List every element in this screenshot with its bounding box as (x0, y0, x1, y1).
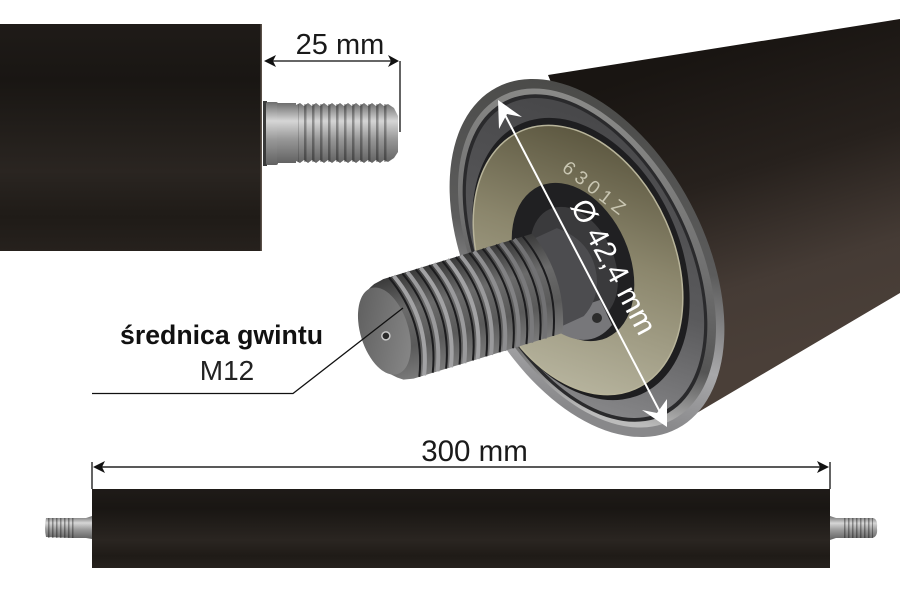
roller body (92, 489, 830, 568)
shaft neck (528, 221, 609, 329)
left stud (45, 516, 92, 539)
thread body (349, 231, 572, 389)
bearing shield (433, 92, 723, 428)
leader line (92, 308, 403, 394)
panel: close-up of roller side with stud (0, 24, 398, 251)
dimension: 25 mm (264, 29, 400, 132)
label: 25 mm: 25 mm (296, 29, 384, 61)
shaft end face (348, 281, 421, 381)
bearing housing rings (393, 33, 781, 483)
right stud (830, 516, 877, 540)
roller body (548, 19, 900, 430)
dimension: 300 mm (92, 435, 830, 489)
label: M12: M12 (200, 355, 254, 386)
roller body close-up (0, 24, 262, 251)
full roller (45, 489, 877, 568)
centre hole (381, 331, 391, 341)
bearing hub (488, 163, 658, 361)
threaded shaft (347, 219, 611, 390)
label: 300 mm: 300 mm (421, 435, 528, 468)
label: thread diameter: średnica gwintu (120, 320, 323, 350)
label: diameter: Ø 42,4 mm (564, 194, 663, 340)
dimension: diameter arrow (498, 100, 667, 427)
large roller close-up (393, 19, 900, 483)
threaded stud (263, 101, 398, 166)
callout: thread diameter (92, 308, 403, 394)
bearing code: 6301Z (558, 157, 633, 223)
thread ridges (389, 233, 564, 377)
